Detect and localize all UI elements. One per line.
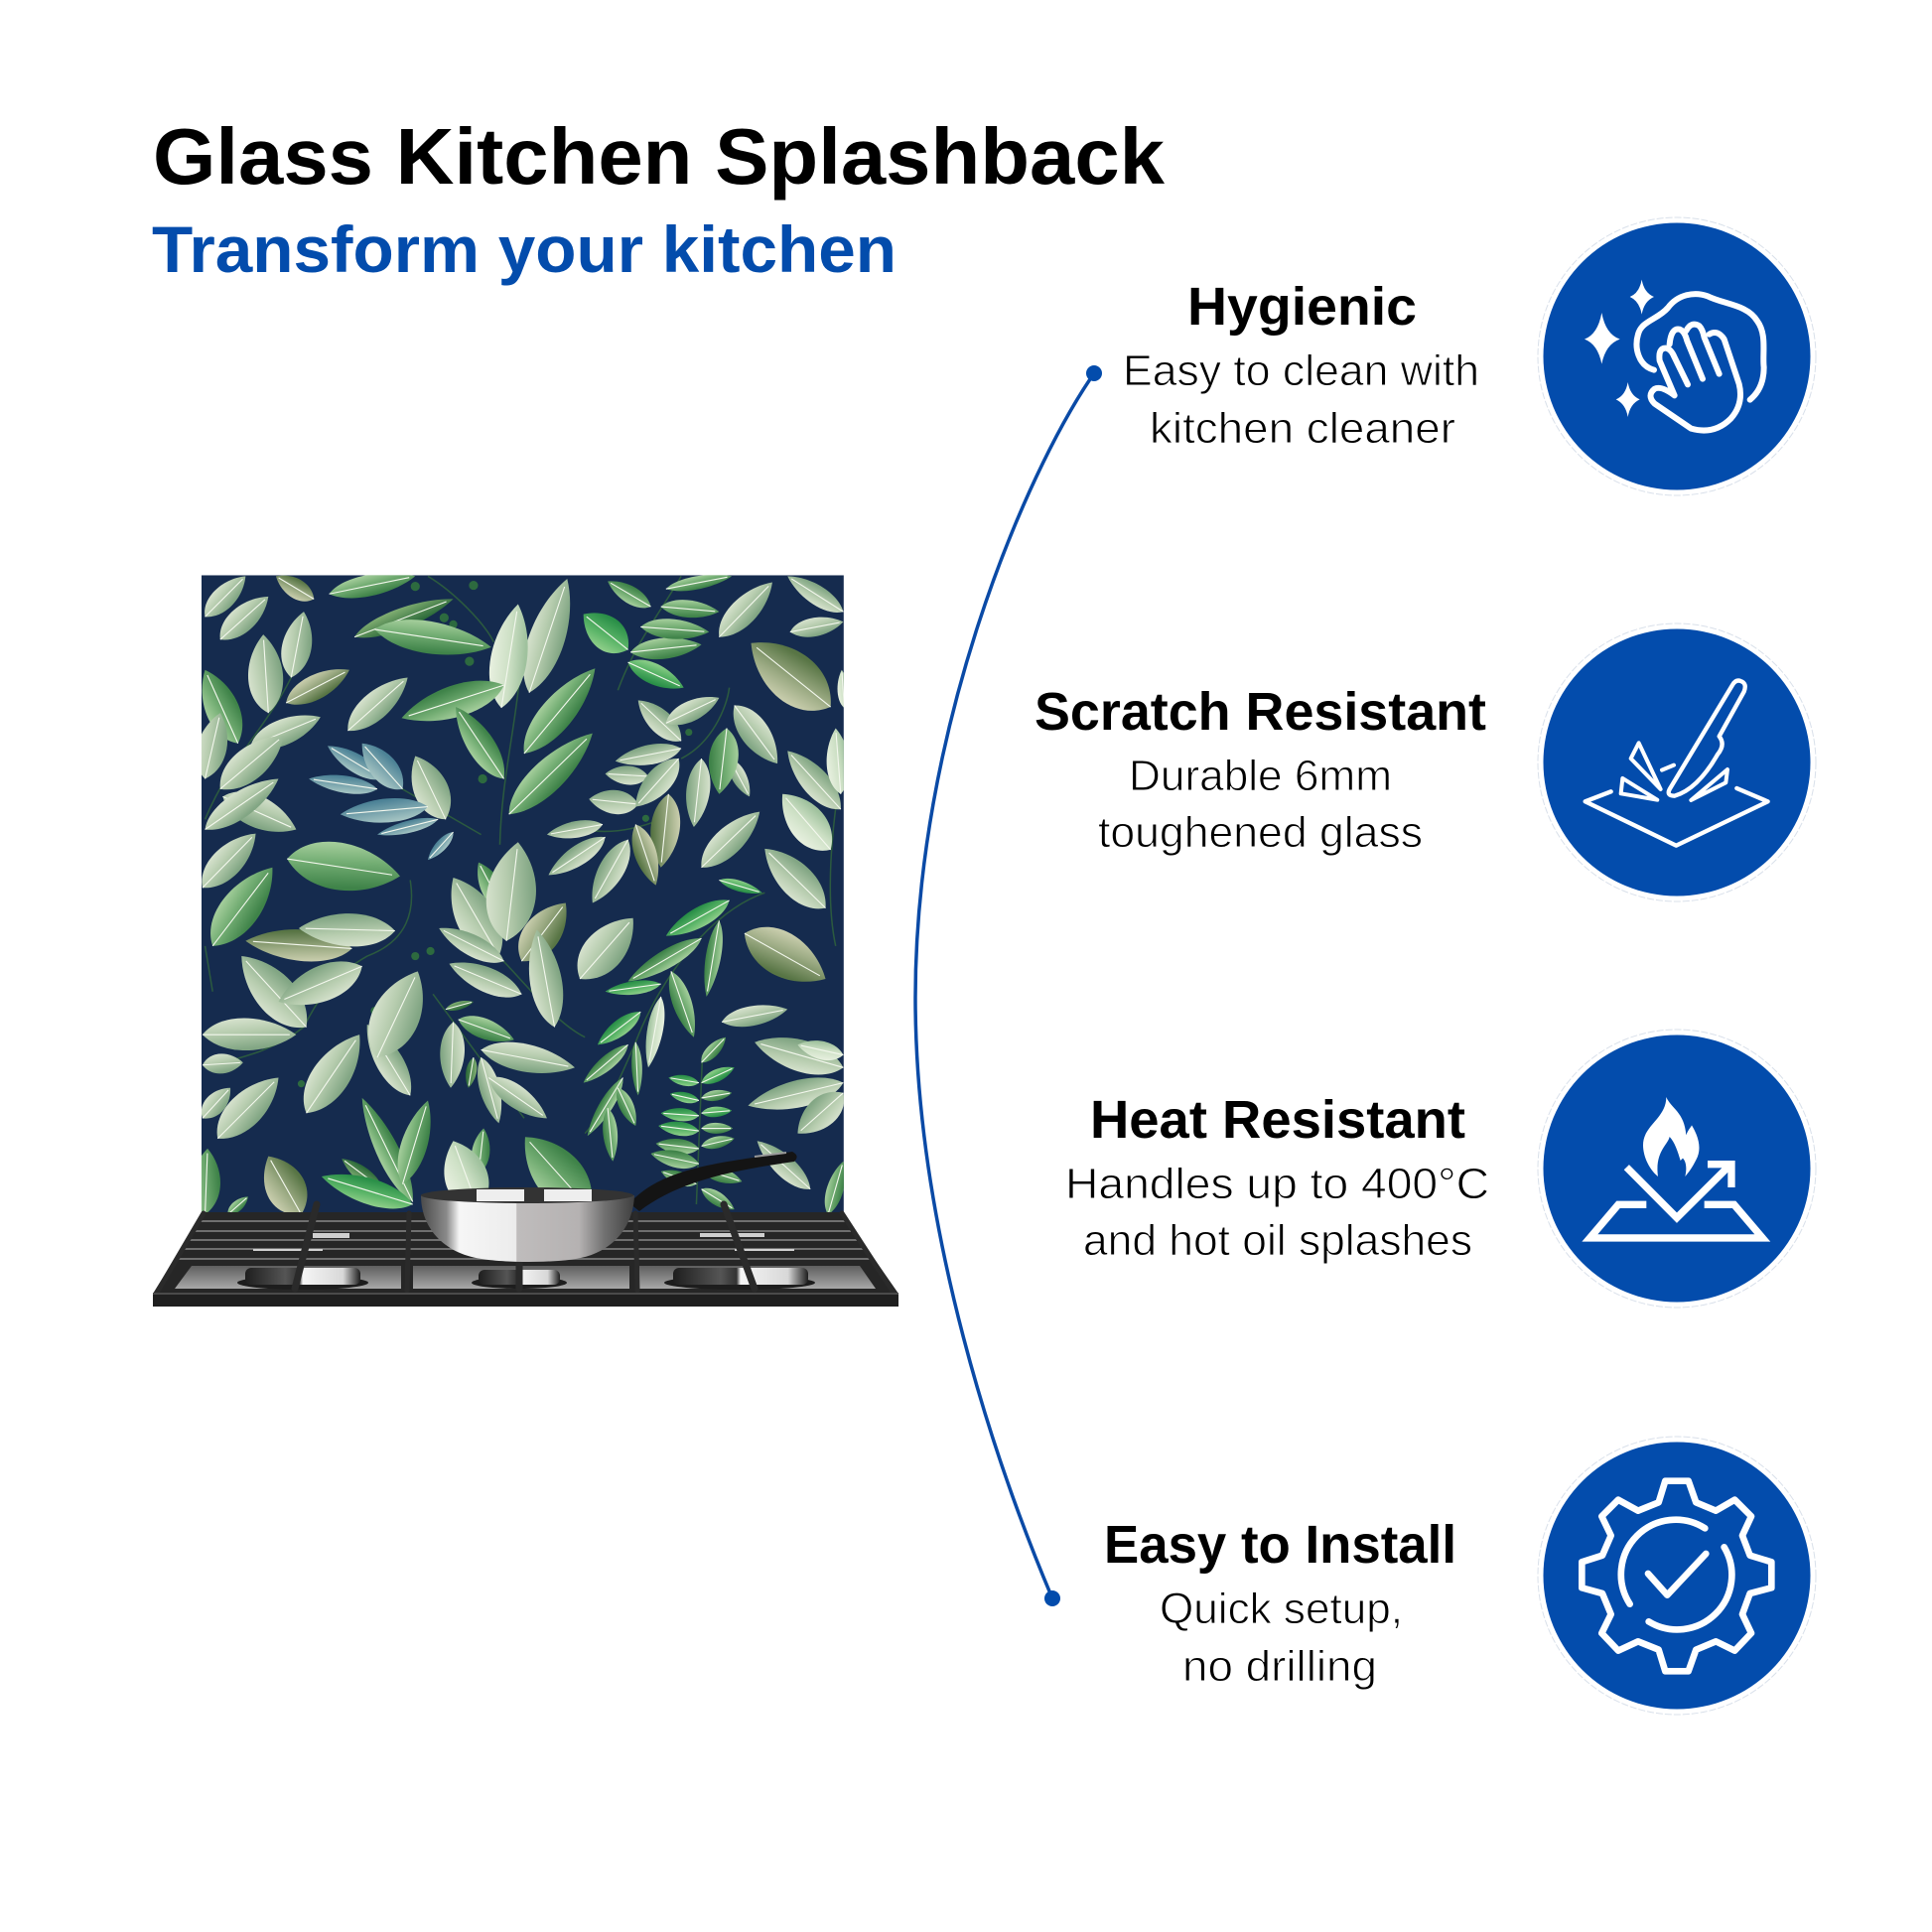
feature: Easy to Install <box>1104 1515 1456 1691</box>
heading: Hygienic: Hygienic <box>1187 277 1417 337</box>
heading: Easy to Install: Easy to Install <box>1104 1515 1456 1575</box>
text: Heat Resistant description: Handles up to 400°C <box>1065 1160 1489 1208</box>
feature: Hygienic <box>1123 277 1479 453</box>
title: Glass Kitchen Splashback <box>153 112 1166 201</box>
text: Heat Resistant description <box>1065 1160 1489 1265</box>
gas hob <box>153 1204 898 1307</box>
product image: splashback behind hob <box>153 566 898 1307</box>
text: Hygienic description <box>1123 346 1479 453</box>
text: Scratch Resistant description: Durable 6mm <box>1129 752 1392 800</box>
text: Scratch Resistant description <box>1098 752 1423 857</box>
heading: Scratch Resistant: Scratch Resistant <box>1035 682 1486 742</box>
icon: hand wiping with sparkles <box>1538 217 1816 495</box>
connector arc with end dots <box>915 365 1102 1606</box>
subtitle: Transform your kitchen <box>152 212 897 286</box>
feature: Scratch Resistant <box>1035 682 1486 857</box>
icon: knife scratching glass <box>1538 623 1816 901</box>
text: Hygienic description: kitchen cleaner <box>1150 404 1455 453</box>
icon: gear with check mark <box>1538 1437 1816 1715</box>
text: Heat Resistant description: and hot oil splashes <box>1083 1216 1472 1265</box>
frying pan <box>421 1152 797 1262</box>
text: Scratch Resistant description: toughened glass <box>1098 808 1423 857</box>
text: Hygienic description: Easy to clean with <box>1123 346 1479 395</box>
feature: Heat Resistant <box>1065 1090 1489 1265</box>
text: Easy to Install description <box>1160 1585 1403 1691</box>
heading: Heat Resistant: Heat Resistant <box>1090 1090 1465 1150</box>
text: Easy to Install description: Quick setup, <box>1160 1585 1403 1633</box>
panel: leaf-pattern glass splashback <box>190 566 854 1226</box>
text: Easy to Install description: no drilling <box>1182 1642 1377 1691</box>
icon: flame deflected from surface <box>1538 1030 1816 1308</box>
